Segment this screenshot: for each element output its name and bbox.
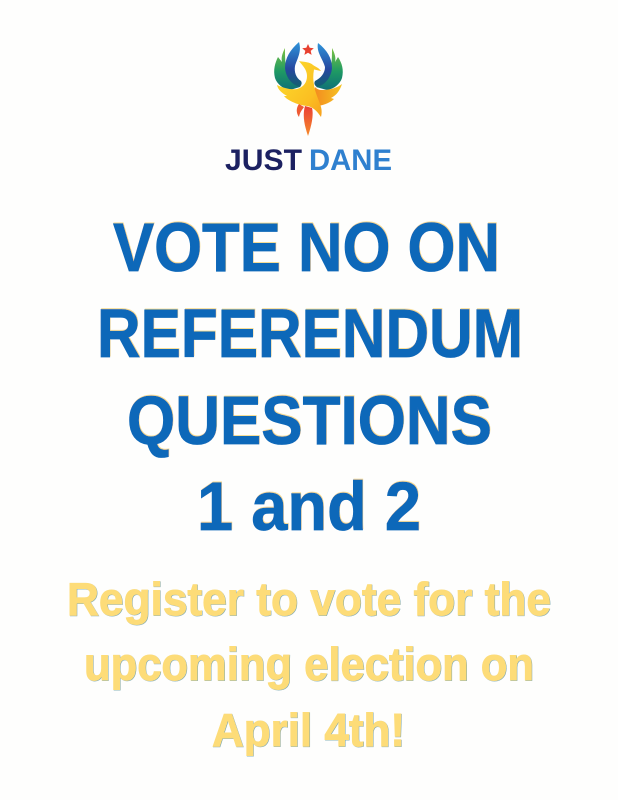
icon: right blue wing [314, 43, 332, 87]
heading line 2: REFERENDUM [97, 295, 523, 372]
call to action line 2: upcoming election on [84, 638, 534, 690]
icon: star [302, 44, 314, 55]
icon: phoenix [274, 42, 343, 136]
icon: yellow body and wing [277, 61, 322, 117]
heading line 4: 1 and 2 [197, 468, 421, 545]
icon: right green wing [316, 48, 343, 90]
call to action line 3: April 4th! [212, 704, 405, 756]
heading [97, 209, 523, 545]
logo: Just Dane [225, 42, 392, 177]
call to action line 1: Register to vote for the [67, 573, 551, 625]
icon: orange wing [312, 84, 342, 106]
icon: centre tail flame [304, 106, 313, 136]
heading line 1: VOTE NO ON [113, 209, 500, 286]
call to action [67, 573, 551, 756]
icon: left tail flame [297, 104, 304, 117]
icon: left green wing [274, 48, 300, 90]
icon: left blue wing [285, 42, 302, 87]
logo word: DANE: DANE [309, 144, 392, 177]
heading line 3: QUESTIONS [127, 382, 492, 459]
logo word: JUST: JUST [225, 144, 302, 177]
